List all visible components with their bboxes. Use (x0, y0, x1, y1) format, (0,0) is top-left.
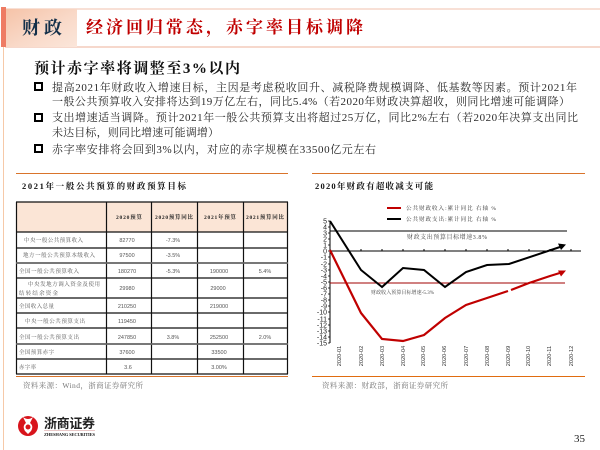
x axis labels: 2020-02 (359, 346, 365, 366)
table body rows: 中央发地方调入资金及使用 (28, 280, 100, 288)
y axis: -12 (317, 322, 327, 330)
bullet 2 (35, 110, 578, 139)
chart title: 2020年财政有超收减支可能 (315, 181, 433, 191)
table body rows: 82770 (119, 238, 135, 244)
bullet list (35, 80, 578, 156)
y axis: -6 (321, 286, 327, 292)
table body rows: 219000 (210, 304, 228, 310)
expenditure target label: 财政支出预算目标增速3.8% (407, 233, 487, 241)
y axis: -4 (321, 274, 327, 280)
table title: 2021年一般公共预算的财政预算目标 (22, 181, 187, 191)
bullet 1 (35, 80, 577, 108)
y axis: 5 (323, 218, 327, 226)
table body rows: 地方一般公共预算本级收入 (23, 251, 95, 259)
panel: fiscal line chart (312, 173, 585, 391)
table body rows: 252500 (210, 335, 228, 341)
revenue series (330, 250, 566, 341)
y axis: 1 (323, 242, 327, 250)
x axis labels: 2020-03 (380, 346, 386, 366)
table body rows: 180270 (118, 269, 136, 275)
x axis labels: 2020-04 (401, 346, 407, 366)
table body rows: 247850 (118, 335, 136, 341)
table body rows: 2.0% (259, 335, 271, 341)
y axis: -9 (321, 304, 327, 310)
expenditure series (330, 221, 566, 287)
table header row: 2020预算同比 (155, 213, 193, 221)
y axis: -7 (321, 292, 327, 298)
bullet 1: 一般公共预算收入安排将达到19万亿左右，同比5.4%（若2020年财政决算超收，则同比增速可能调降） (52, 94, 570, 108)
y axis: -15 (317, 340, 327, 348)
table body rows: 190000 (210, 269, 228, 275)
company name latin: ZHESHANG SECURITIES (44, 432, 95, 437)
x axis labels: 2020-09 (506, 346, 512, 366)
table body rows: 3.8% (167, 335, 179, 341)
bullet 3: 赤字率安排将会回到3%以内，对应的赤字规模在33500亿元左右 (52, 142, 376, 156)
x axis labels: 2020-01 (337, 346, 343, 366)
table body rows: 中央一般公共预算收入 (24, 236, 83, 244)
table header row (116, 213, 284, 221)
table (16, 202, 288, 374)
icon: logo mark (18, 416, 38, 436)
table body rows: 全国预算赤字 (19, 348, 54, 356)
x axis labels: 2020-06 (442, 346, 448, 366)
table body rows: 结转结余资金 (19, 289, 58, 297)
table body rows: 赤字率 (19, 363, 36, 371)
y axis (317, 218, 330, 348)
table header row: 2021预算同比 (246, 213, 284, 221)
left margin line (3, 47, 4, 450)
table header row: 2021年预算 (204, 213, 236, 221)
logo (18, 413, 95, 437)
table body rows: 97500 (119, 253, 135, 259)
y axis: 2 (323, 236, 327, 244)
table body rows: 5.4% (259, 269, 271, 275)
table body rows: 全国收入总量 (19, 302, 54, 310)
section tag: 财政 (22, 18, 62, 38)
y axis: 3 (323, 230, 327, 238)
y axis: -14 (317, 334, 327, 342)
subheading: 预计赤字率将调整至3%以内 (34, 59, 240, 77)
y axis: -5 (321, 280, 327, 286)
bullet 2: 未达目标，则同比增速可能调增） (52, 125, 219, 139)
table source: 资料来源：Wind，浙商证券研究所 (23, 380, 144, 391)
expenditure target line (330, 230, 567, 232)
table body rows: 29980 (119, 286, 135, 292)
table body rows: 29000 (210, 286, 226, 292)
x axis labels: 2020-12 (569, 346, 575, 366)
table body rows: 33500 (211, 350, 227, 356)
page number: 35 (574, 433, 586, 445)
revenue target line (330, 282, 565, 284)
table body rows: 全国一般公共预算支出 (19, 333, 79, 341)
revenue target label: 财政收入预算目标增速-5.3% (371, 289, 434, 296)
table body rows: 37600 (119, 350, 135, 356)
table body rows: 3.00% (211, 365, 227, 371)
x axis labels (337, 346, 575, 366)
header band (1, 7, 600, 48)
x axis labels: 2020-05 (421, 346, 427, 366)
chart legend (387, 204, 496, 223)
x axis labels: 2020-08 (485, 346, 491, 366)
x axis labels: 2020-11 (547, 346, 553, 366)
page title: 经济回归常态，赤字率目标调降 (86, 17, 363, 38)
y axis: -1 (321, 254, 327, 262)
table body rows: -3.5% (166, 253, 180, 259)
y axis: -2 (321, 262, 327, 268)
table body rows: -5.3% (166, 269, 180, 275)
chart legend: 公共财政收入:累计同比 右轴 % (406, 204, 496, 212)
chart legend: 公共财政支出:累计同比 右轴 % (406, 215, 496, 223)
panel: budget table (16, 173, 288, 391)
table body rows: -7.3% (166, 238, 180, 244)
table body rows: 全国一般公共预算收入 (19, 267, 79, 275)
y axis: -11 (317, 316, 327, 324)
y axis: 0 (323, 248, 327, 256)
zero axis (330, 249, 581, 251)
y axis: -10 (317, 310, 327, 316)
table body rows: 119450 (118, 319, 136, 325)
chart source: 资料来源：财政部，浙商证券研究所 (322, 380, 448, 391)
table body rows: 3.6 (124, 365, 132, 371)
x axis labels: 2020-07 (464, 346, 470, 366)
table body rows: 210250 (118, 304, 136, 310)
y axis: -8 (321, 298, 327, 304)
table body rows (19, 236, 271, 371)
y axis: -3 (321, 268, 327, 274)
company name: 浙商证券 (44, 413, 95, 432)
table header row: 2020预算 (116, 213, 142, 221)
table body rows: 中央一般公共预算支出 (25, 317, 85, 325)
x axis labels: 2020-10 (526, 346, 532, 366)
bullet 2: 支出增速适当调降。预计2021年一般公共预算支出将超过25万亿，同比2%左右（若2020年决算支出同比 (52, 110, 578, 124)
bullet 1: 提高2021年财政收入增速目标，主因是考虑税收回升、减税降费规模调降、低基数等因素。预计2021年 (52, 80, 577, 94)
y axis: -13 (317, 328, 327, 336)
y axis: 4 (323, 224, 327, 232)
